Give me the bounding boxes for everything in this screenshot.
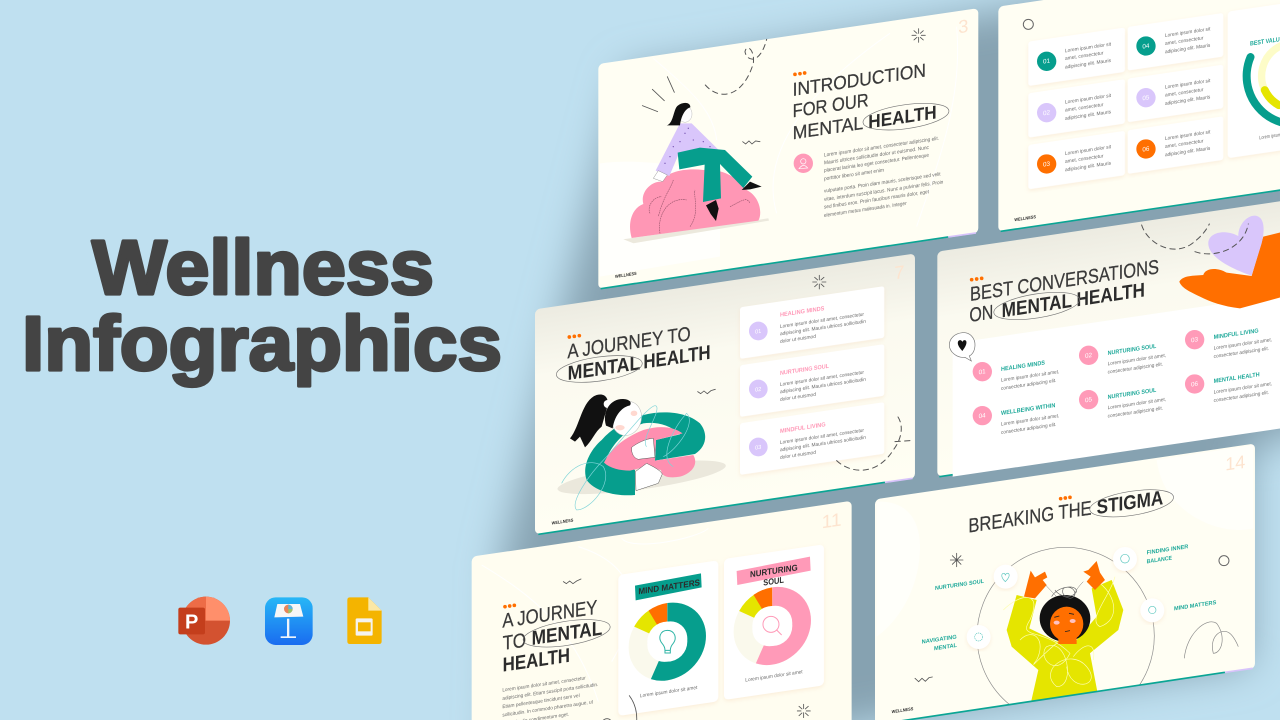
slide 7 title: MENTAL	[568, 352, 640, 385]
card: nurturing soul donut	[724, 544, 824, 700]
panel: slide 3 introduction	[598, 8, 978, 289]
card numbers	[755, 329, 761, 452]
slide number 14: 14	[1225, 451, 1245, 475]
slide 3 title	[793, 59, 951, 143]
slide number 3: 3	[958, 15, 968, 37]
slide 3 title: HEALTH	[868, 101, 937, 132]
card text: adipiscing elit. Mauris	[1065, 109, 1111, 122]
faint background arcs	[600, 27, 958, 277]
card text: Lorem ipsum dolor sit	[1065, 144, 1112, 157]
illustration: woman sitting on brain	[623, 77, 769, 243]
slide background	[472, 501, 852, 720]
card: nurturing soul: NURTURING SOUL	[780, 364, 829, 377]
item 05: 05	[1085, 396, 1092, 404]
card text: amet, consectetur	[1165, 138, 1204, 150]
icon: Keynote	[265, 597, 313, 645]
card: mind matters donut: Lorem ipsum dolor sit amet	[640, 685, 698, 699]
card text: Lorem ipsum dolor sit	[1065, 93, 1112, 106]
item body text: Lorem ipsum dolor sit amet,	[1001, 413, 1059, 428]
item 06: MENTAL HEALTH	[1214, 372, 1260, 385]
item 01: HEALING MINDS	[1001, 361, 1045, 373]
slide title: MENTAL HEALTH	[1002, 279, 1145, 322]
orbit node: clock	[1113, 547, 1137, 571]
item body text: consectetur adipiscing elit.	[1001, 378, 1056, 392]
slide number 11: 11	[822, 508, 842, 532]
card body text: adipiscing elit. Mauris ultrices sollicitudin	[780, 377, 866, 395]
card text: adipiscing elit. Mauris	[1065, 58, 1111, 71]
card 05	[1128, 65, 1223, 122]
dashed flight path	[705, 39, 767, 94]
dots	[793, 71, 806, 76]
slide 3 body text: vitae, interdum suscipit lacus. Nunc a pulvinar felis. Proin	[824, 179, 943, 203]
card body text: dolor ut euismod	[780, 450, 816, 461]
card: nurturing soul donut: SOUL	[763, 575, 785, 588]
slide title: BREAKING THE	[968, 498, 1092, 538]
slide 3 title: FOR OUR	[793, 89, 869, 121]
squiggle	[915, 677, 932, 682]
slide 7 title	[555, 323, 711, 387]
illustration: woman hugging brain	[556, 394, 727, 510]
slide title: MENTAL	[532, 618, 602, 650]
item 04: WELLBEING WITHIN	[1001, 403, 1055, 417]
slide 3 body text: vulputate porta. Proin diam mauris, scelerisque sed velit	[824, 171, 941, 195]
ring marker	[1023, 19, 1033, 29]
icon: person badge	[794, 154, 813, 173]
item body text: Lorem ipsum dolor sit amet,	[1108, 397, 1166, 411]
orbit node: heart	[994, 565, 1018, 589]
card 02	[1028, 79, 1125, 138]
card text: amet, consectetur	[1165, 87, 1204, 99]
footer label: WELLNESS	[1014, 214, 1036, 222]
slide 7 title: HEALTH	[643, 342, 711, 374]
bottom strip	[939, 475, 953, 477]
slide title	[502, 597, 612, 677]
slide title	[969, 256, 1159, 327]
slide 3 body text: sed finibus eros. Proin faucibus mauris dolor, eget	[824, 189, 929, 211]
item 03: 03	[1191, 336, 1198, 344]
loop curve	[1184, 622, 1238, 658]
speech bubble with heart	[949, 333, 975, 361]
card body text: Lorem ipsum dolor sit amet, consectetur	[780, 370, 864, 388]
slide body text: adipiscing elit. Etiam suscipit porta sollicitudin.	[502, 682, 598, 702]
sparkle	[912, 29, 925, 42]
card numbers: 03	[755, 445, 761, 452]
item 03: MINDFUL LIVING	[1214, 328, 1259, 341]
card: best value ring chart	[1228, 0, 1280, 158]
card text	[1065, 26, 1211, 173]
card body text: dolor ut euismod	[780, 334, 816, 345]
orbit labels: MENTAL	[934, 643, 958, 652]
card text: Lorem ipsum dolor sit	[1165, 129, 1211, 142]
card 06	[1128, 116, 1223, 174]
card: nurturing soul	[740, 344, 884, 417]
card 06: 06	[1142, 146, 1150, 154]
card 01	[1028, 27, 1125, 86]
card: mindful living	[740, 402, 884, 475]
card text: amet, consectetur	[1065, 50, 1104, 62]
dashed flight path	[837, 415, 910, 470]
item 05: NURTURING SOUL	[1108, 388, 1157, 401]
slide 3 title: INTRODUCTION	[793, 59, 926, 100]
item body text: consectetur adipiscing elit.	[1108, 362, 1163, 376]
orbit node: gear	[967, 625, 991, 649]
slide title	[968, 485, 1175, 538]
slide drop shadow	[495, 0, 1280, 720]
item 03	[1185, 328, 1259, 349]
item 06	[1185, 372, 1260, 394]
card: mindful living: MINDFUL LIVING	[780, 422, 826, 435]
card body text: adipiscing elit. Mauris ultrices sollicitudin	[780, 319, 866, 337]
orbit labels: BALANCE	[1147, 556, 1172, 565]
card numbers: 01	[755, 329, 761, 336]
card: nurturing soul donut: NURTURING	[750, 562, 798, 579]
slide title: HEALTH	[503, 645, 570, 677]
item body text: consectetur adipiscing elit.	[1108, 406, 1163, 420]
slide 7 title: A JOURNEY TO	[567, 323, 691, 363]
slide 3 background	[598, 8, 978, 289]
card body text: Lorem ipsum dolor sit amet, consectetur	[780, 428, 864, 446]
icon: PowerPoint: P	[185, 612, 198, 634]
slide 3 body text: porttitor libero sit amet enim	[824, 168, 884, 182]
slide body text	[502, 675, 598, 720]
item 01: 01	[979, 368, 986, 376]
orbit labels: NURTURING SOUL	[935, 579, 984, 592]
slide 3 body text	[824, 136, 943, 219]
white content panel	[953, 294, 1280, 477]
dots	[970, 276, 983, 281]
slide title: STIGMA	[1097, 487, 1163, 519]
sparkle	[797, 704, 810, 718]
slide background	[875, 443, 1255, 720]
item 04: 04	[979, 412, 986, 420]
app icons row	[178, 597, 382, 645]
footer label: WELLNESS	[615, 271, 637, 279]
bottom strip	[1001, 190, 1280, 231]
bottom strip	[538, 478, 913, 534]
curve decoration	[602, 696, 637, 720]
faint background arcs	[482, 528, 708, 702]
panel: top right slide with six numbered cards	[998, 0, 1280, 232]
slide title: TO	[503, 630, 526, 655]
star	[950, 553, 963, 567]
card 04	[1128, 13, 1223, 71]
card 05: 05	[1142, 94, 1150, 102]
heading: Wellness Infographics: Wellness	[92, 225, 434, 311]
slide 3 body text: Mauris ultrices sollicitudin dolor ut euismod. Nunc	[824, 145, 929, 166]
card text: adipiscing elit. Mauris	[1165, 43, 1211, 55]
card: mind matters donut: MIND MATTERS	[638, 577, 700, 596]
card: healing minds: HEALING MINDS	[780, 306, 824, 319]
slide 7 background	[535, 253, 915, 534]
slide background	[998, 0, 1280, 232]
sparkle	[813, 275, 826, 289]
slide title: ON	[969, 302, 993, 327]
dots	[1059, 495, 1072, 500]
dots	[503, 603, 516, 608]
slide body text: sollicitudin. In commodo pharetra augue, ut	[502, 699, 594, 719]
slide 3 body text: Lorem ipsum dolor sit amet, consectetur adipiscing elit.	[824, 136, 939, 159]
slide 3 title: MENTAL	[793, 112, 863, 143]
card text: Lorem ipsum dolor sit	[1165, 26, 1211, 39]
slide body text: Etiam pellentesque tincidunt sem vel	[502, 693, 580, 710]
item body text: Lorem ipsum dolor sit amet,	[1214, 337, 1272, 352]
illustration: hand holding heart	[1179, 216, 1280, 308]
card 03: 03	[1043, 161, 1050, 169]
icon: Google Slides	[347, 597, 382, 644]
slide number 7: 7	[894, 261, 904, 283]
item 02: NURTURING SOUL	[1108, 344, 1157, 357]
item body text: Lorem ipsum dolor sit amet,	[1108, 353, 1166, 367]
card text: amet, consectetur	[1065, 102, 1104, 114]
orbit labels: MIND MATTERS	[1174, 600, 1216, 612]
footer label: WELLNESS	[552, 517, 573, 526]
item 02	[1079, 344, 1157, 365]
card text: Lorem ipsum dolor sit	[1065, 42, 1112, 54]
slide 3 bottom strip	[601, 233, 976, 289]
item body text: consectetur adipiscing elit.	[1001, 422, 1056, 436]
dashed flight path	[1142, 224, 1248, 254]
card body text: Lorem ipsum dolor sit amet, consectetur	[780, 312, 864, 330]
orbit labels: FINDING INNER	[1147, 544, 1188, 556]
card text: amet, consectetur	[1065, 153, 1104, 165]
item 01	[973, 361, 1045, 381]
item 05	[1079, 388, 1157, 409]
item body text: consectetur adipiscing elit.	[1214, 346, 1269, 360]
card text: adipiscing elit. Mauris	[1065, 161, 1111, 173]
panel: slide 7 journey	[535, 253, 915, 534]
slide background	[937, 200, 1280, 477]
panel: slide 11 donuts	[472, 501, 852, 720]
ring marker	[1219, 556, 1229, 566]
squiggle	[563, 579, 581, 584]
slide 3 body text: elementum metus malesuada in. Integer	[824, 201, 907, 219]
item body text	[1001, 337, 1272, 436]
squiggle	[698, 389, 715, 394]
dots	[567, 334, 581, 339]
card: mind matters donut	[618, 560, 718, 716]
orbit labels	[922, 544, 1216, 652]
card body text: dolor ut euismod	[780, 392, 816, 403]
card: nurturing soul donut: Lorem ipsum dolor sit amet	[745, 669, 803, 684]
card numbers: 02	[755, 387, 761, 394]
icon: PowerPoint	[178, 597, 230, 645]
item 02: 02	[1085, 352, 1092, 360]
card: healing minds	[740, 286, 884, 359]
orbit and person	[977, 547, 1154, 720]
footer label: WELLNESS	[892, 706, 913, 714]
card 02: 02	[1043, 109, 1050, 117]
orbit node: mind	[1140, 598, 1164, 622]
card text: adipiscing elit. Mauris	[1165, 94, 1211, 107]
item 04	[973, 403, 1055, 425]
card text: adipiscing elit. Mauris	[1165, 146, 1211, 158]
slide 3 body text: placerat lacinia leo eget consectetur. Pellentesque	[824, 153, 929, 174]
card 01: 01	[1043, 58, 1050, 66]
item body text: Lorem ipsum dolor sit amet,	[1214, 381, 1272, 396]
item body text: Lorem ipsum dolor sit amet,	[1001, 369, 1059, 384]
orbit labels: NAVIGATING	[922, 634, 957, 646]
slide title: BEST CONVERSATIONS	[970, 256, 1159, 306]
card body text	[780, 312, 866, 461]
slide title: A JOURNEY	[502, 597, 597, 633]
card text: amet, consectetur	[1165, 35, 1204, 47]
slide body text: Lorem ipsum dolor sit amet, consectetur	[502, 675, 586, 694]
card 03	[1028, 131, 1125, 189]
panel: conversations slide	[937, 200, 1280, 477]
card 04: 04	[1142, 43, 1150, 51]
card body text: adipiscing elit. Mauris ultrices sollicitudin	[780, 435, 866, 453]
heading: Wellness Infographics	[22, 225, 502, 387]
squiggle	[743, 141, 760, 144]
item body text: consectetur adipiscing elit.	[1214, 390, 1269, 404]
card text: Lorem ipsum dolor sit	[1165, 78, 1211, 91]
panel: slide 14 breaking the stigma	[875, 443, 1255, 720]
bottom strip	[878, 668, 1253, 720]
faint background shape	[877, 445, 1253, 637]
heading: Wellness Infographics: Infographics	[22, 301, 502, 387]
item 06: 06	[1191, 381, 1198, 389]
